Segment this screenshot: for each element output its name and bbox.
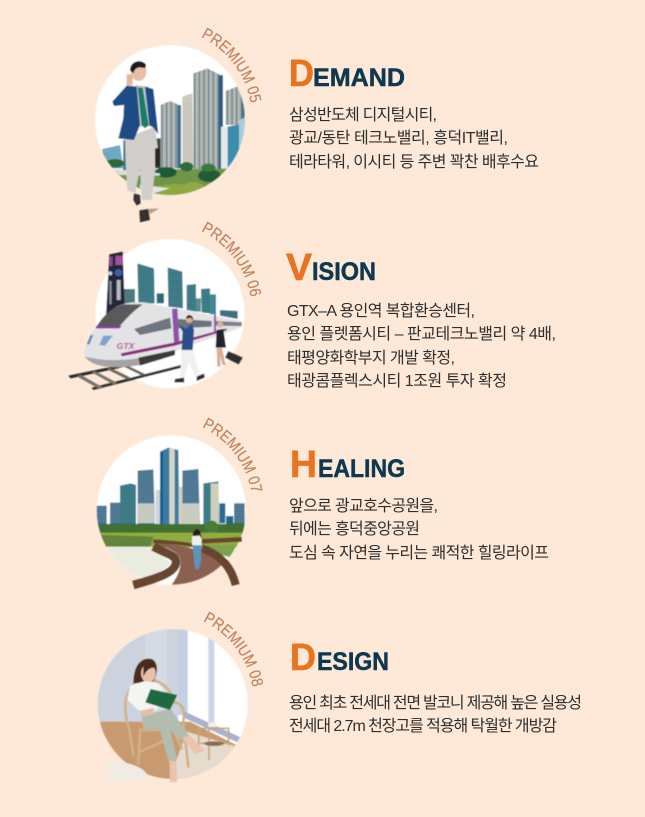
text block: healing xyxy=(289,497,549,562)
text block: vision: 용인 플렛폼시티 – 판교테크노밸리 약 4배, xyxy=(287,325,556,343)
woman walking xyxy=(192,529,202,569)
heading: vision: V xyxy=(286,247,313,289)
two passengers xyxy=(174,315,243,382)
side table xyxy=(198,722,229,760)
heading: healing: EALING xyxy=(318,455,405,483)
woman reading xyxy=(127,659,205,782)
skyline xyxy=(124,263,238,319)
heading: vision xyxy=(286,247,376,289)
garden xyxy=(106,158,228,196)
heading: demand: EMAND xyxy=(313,64,405,92)
heading: healing: H xyxy=(290,444,317,486)
label: premium 07: PREMIUM 07 xyxy=(202,418,262,491)
label: premium 06: PREMIUM 06 xyxy=(202,222,262,296)
heading: demand: D xyxy=(289,53,314,95)
text block: vision: 태평양화학부지 개발 확정, xyxy=(287,349,455,367)
skyline xyxy=(97,448,245,527)
text block: demand: 광교/동탄 테크노밸리, 흥덕IT밸리, xyxy=(289,129,508,147)
railway tracks xyxy=(68,357,185,390)
illustration: GTX train and station tower xyxy=(68,239,245,390)
boardwalk railing xyxy=(133,539,242,585)
wooden floor xyxy=(99,721,236,780)
boardwalk deck xyxy=(152,542,222,586)
heading: design: D xyxy=(290,637,316,679)
text block: healing: 뒤에는 흥덕중앙공원 xyxy=(289,520,420,538)
trees and marsh xyxy=(97,521,247,580)
tower group xyxy=(123,68,245,173)
label: premium 08: PREMIUM 08 xyxy=(204,612,263,686)
train xyxy=(84,302,242,367)
text block: design: 용인 최초 전세대 전면 발코니 제공해 높은 실용성 xyxy=(289,694,582,712)
text block: healing: 도심 속 자연을 누리는 쾌적한 힐링라이프 xyxy=(289,544,549,562)
heading: vision: ISION xyxy=(312,258,376,286)
text block: healing: 앞으로 광교호수공원을, xyxy=(289,497,438,515)
illustration: lakeside park with boardwalk xyxy=(97,435,247,590)
text block: demand xyxy=(289,106,539,171)
text block: design: 전세대 2.7m 천장고를 적용해 탁월한 개방감 xyxy=(289,717,557,735)
distant towers xyxy=(102,145,123,168)
heading: design xyxy=(290,637,389,679)
text block: vision xyxy=(287,302,556,390)
room wall xyxy=(97,625,178,722)
man walking xyxy=(112,61,160,222)
text block: vision: GTX–A 용인역 복합환승센터, xyxy=(287,302,475,320)
label: premium 05: PREMIUM 05 xyxy=(202,28,262,102)
rattan chair xyxy=(125,680,188,767)
heading: healing xyxy=(290,444,405,486)
heading: demand xyxy=(289,53,405,95)
train: GTX xyxy=(117,341,136,351)
illustration: businessman and apartment towers xyxy=(95,45,247,222)
text block: demand: 테라타워, 이시티 등 주변 꽉찬 배후수요 xyxy=(289,153,539,171)
illustration: woman reading in a chair by a window xyxy=(97,625,248,782)
station tower xyxy=(106,252,125,317)
heading: design: ESIGN xyxy=(317,648,389,676)
window frames xyxy=(178,628,240,742)
text block: demand: 삼성반도체 디지털시티, xyxy=(289,106,437,124)
cat xyxy=(106,762,149,781)
text block: vision: 태광콤플렉스시티 1조원 투자 확정 xyxy=(287,372,507,390)
text block: design xyxy=(289,694,582,735)
